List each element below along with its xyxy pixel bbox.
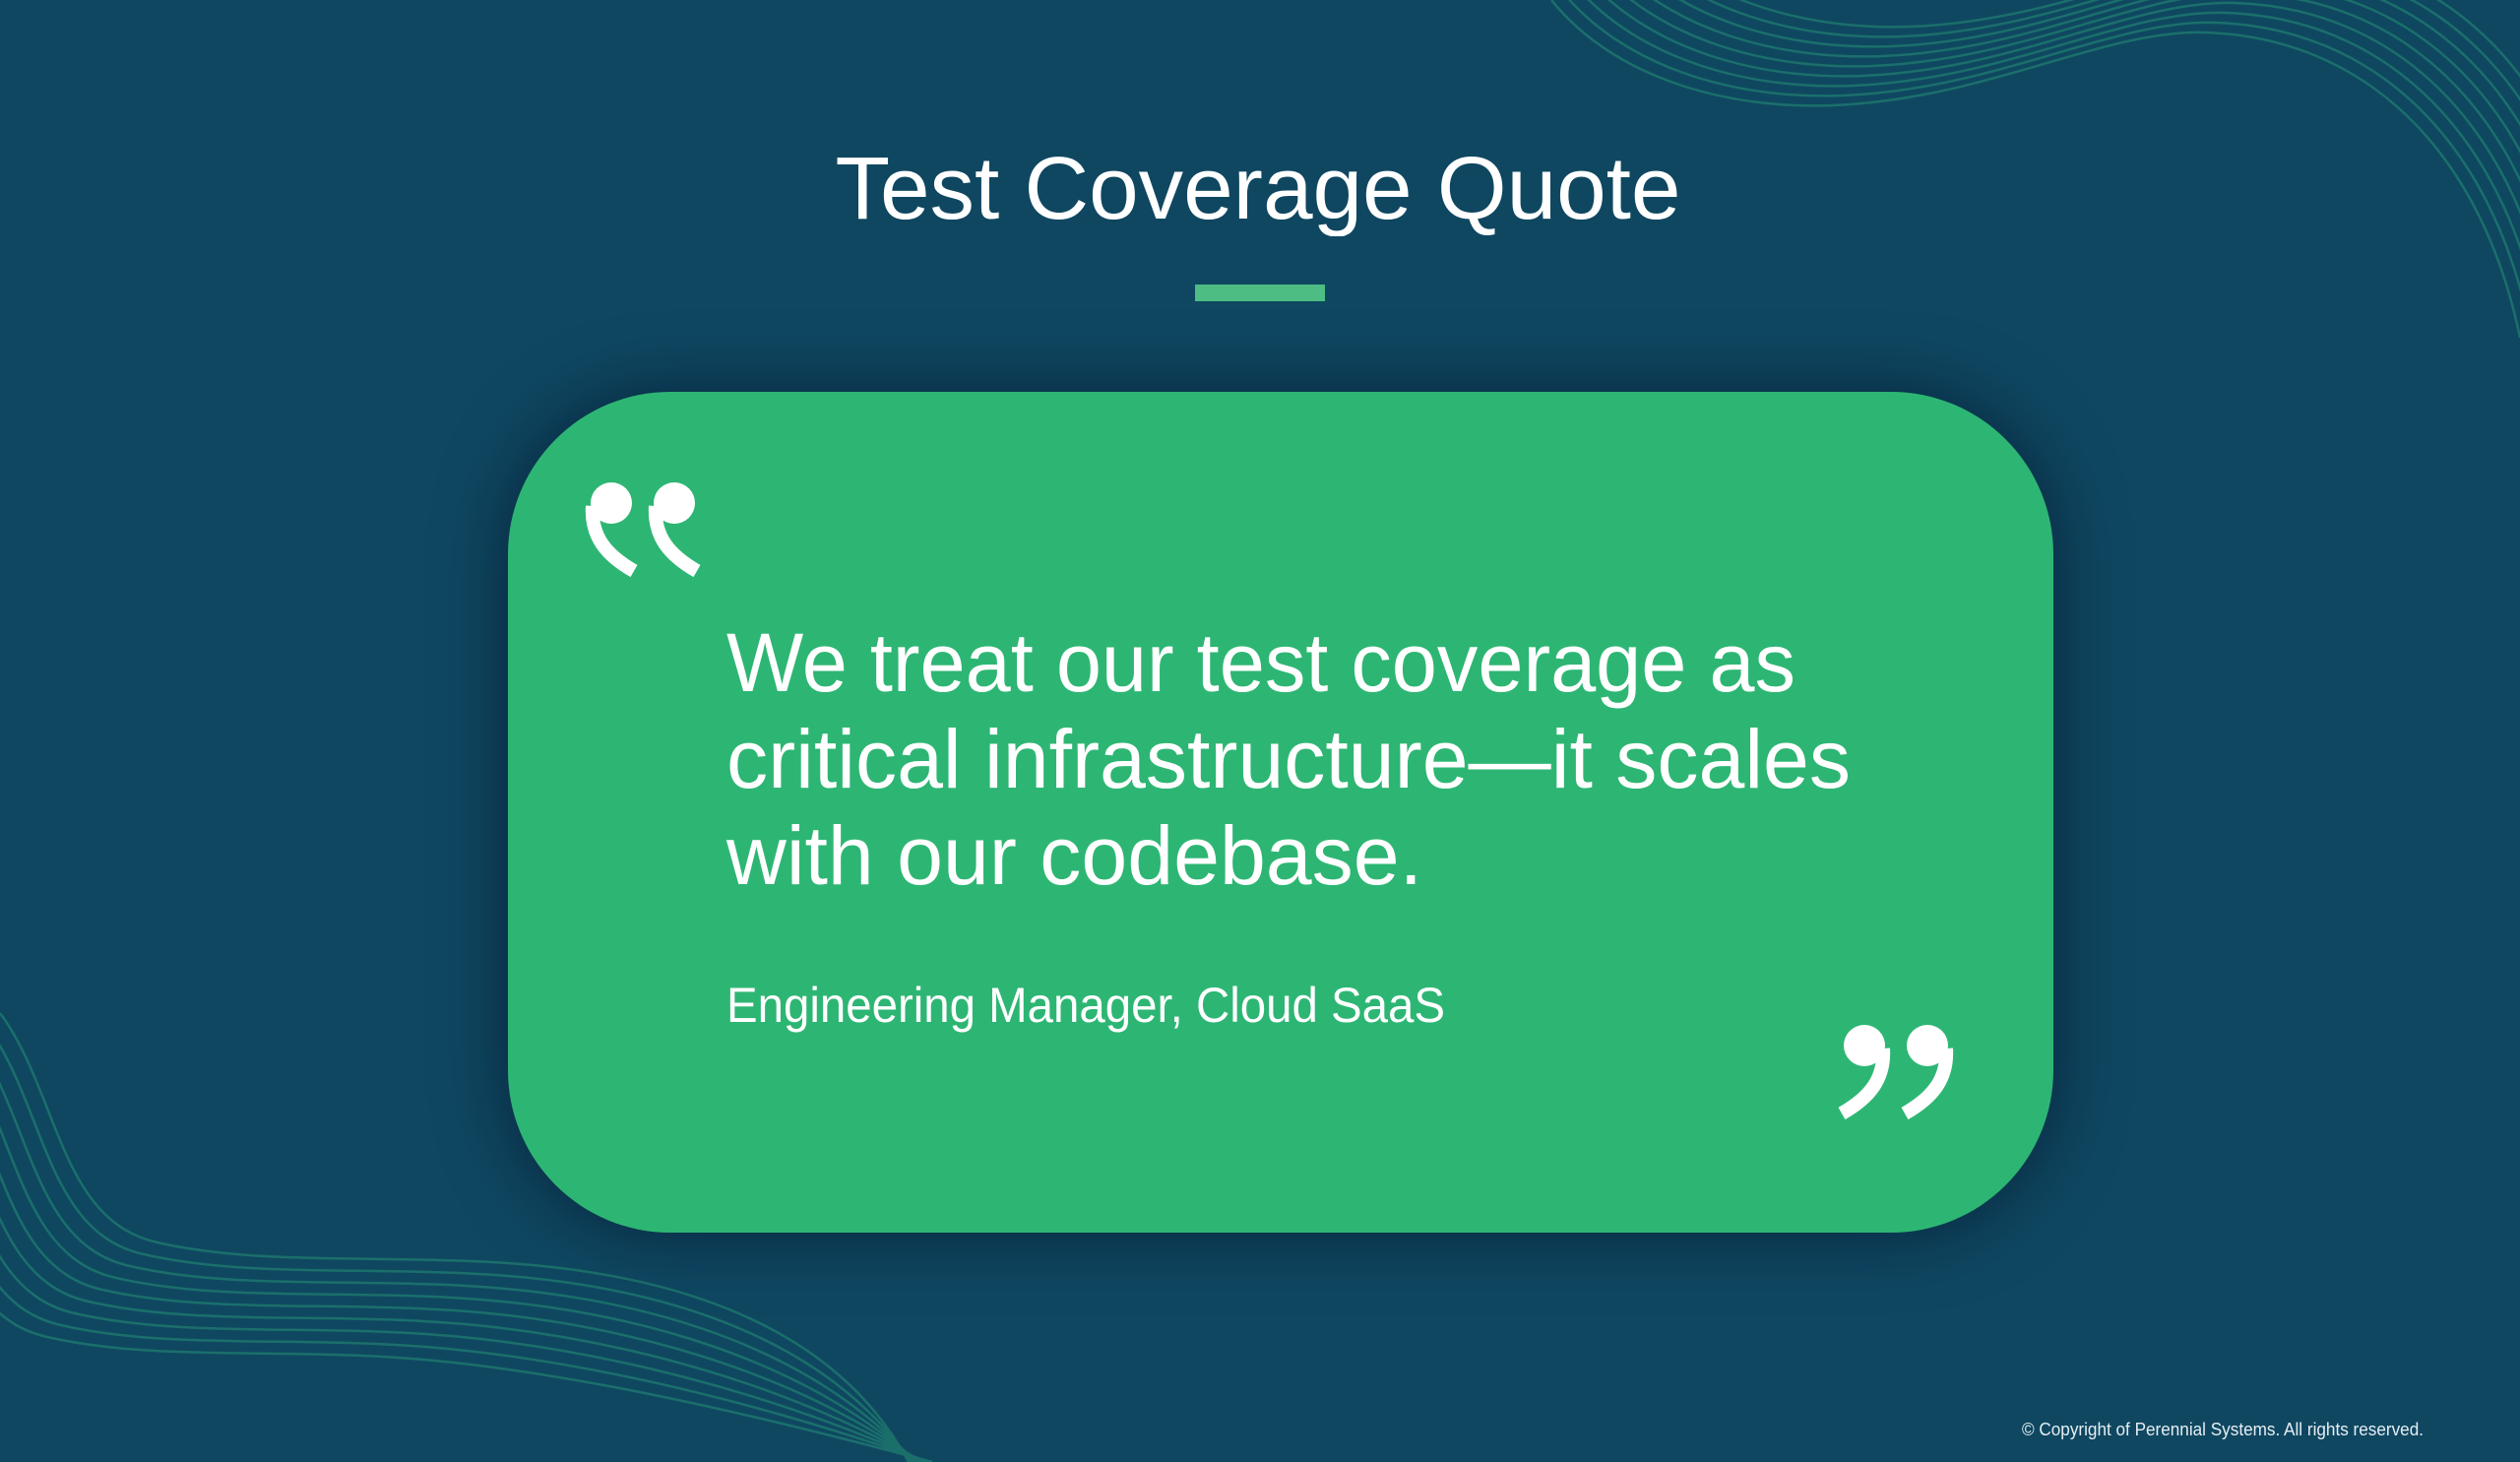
panel: quote card: [508, 392, 2053, 1233]
quote text: critical infrastructure—it scales: [726, 713, 1851, 805]
title underline: [1195, 285, 1325, 301]
icon: close quote: [1839, 1025, 1953, 1119]
quote text: with our codebase.: [725, 809, 1422, 902]
quote text: We treat our test coverage as: [726, 616, 1796, 709]
icon: open quote: [585, 482, 701, 577]
quote text: Engineering Manager, Cloud SaaS: [726, 978, 1445, 1033]
quote text: [725, 616, 1851, 1033]
title: Test Coverage Quote: [835, 140, 1681, 236]
